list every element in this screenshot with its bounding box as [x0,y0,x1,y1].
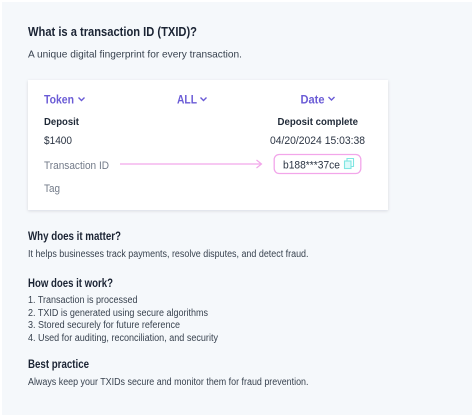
section: best practice [28,359,308,388]
amount: $1400 [44,135,72,147]
card background [28,80,388,210]
column header: ALL: ALL [177,94,197,106]
numbered list: 2. TXID is generated using secure algorithms [28,308,208,319]
section: how does it work [28,278,218,344]
section: why does it matter: It helps businesses track payments, resolve disputes, and detect fraud. [28,249,308,260]
section: how does it work: How does it work? [28,278,113,290]
title: What is a transaction ID (TXID)? [28,25,197,39]
tag label: Tag [44,183,60,195]
panel: transaction card [28,80,388,210]
column header: Token: Token [44,94,74,106]
deposit label: Deposit [44,116,79,128]
numbered list: 1. Transaction is processed [28,295,138,306]
numbered list [28,295,218,344]
numbered list: 3. Stored securely for future reference [28,320,180,331]
section: best practice: Always keep your TXIDs secure and monitor them for fraud prevention. [28,377,308,388]
column header: Date: Date [300,94,324,106]
section: best practice: Best practice [28,359,89,371]
section: why does it matter: Why does it matter? [28,231,121,243]
transaction ID chip: b188***37ce [283,160,340,172]
arrow [120,160,262,168]
transaction ID chip [274,154,361,174]
section: why does it matter [28,231,308,260]
timestamp: 04/20/2024 15:03:38 [270,135,365,147]
numbered list: 4. Used for auditing, reconciliation, and security [28,333,218,344]
deposit status: Deposit complete [278,116,358,128]
icon: copy [344,158,354,168]
transaction ID label: Transaction ID [44,160,109,172]
subtitle: A unique digital fingerprint for every transaction. [28,48,242,60]
